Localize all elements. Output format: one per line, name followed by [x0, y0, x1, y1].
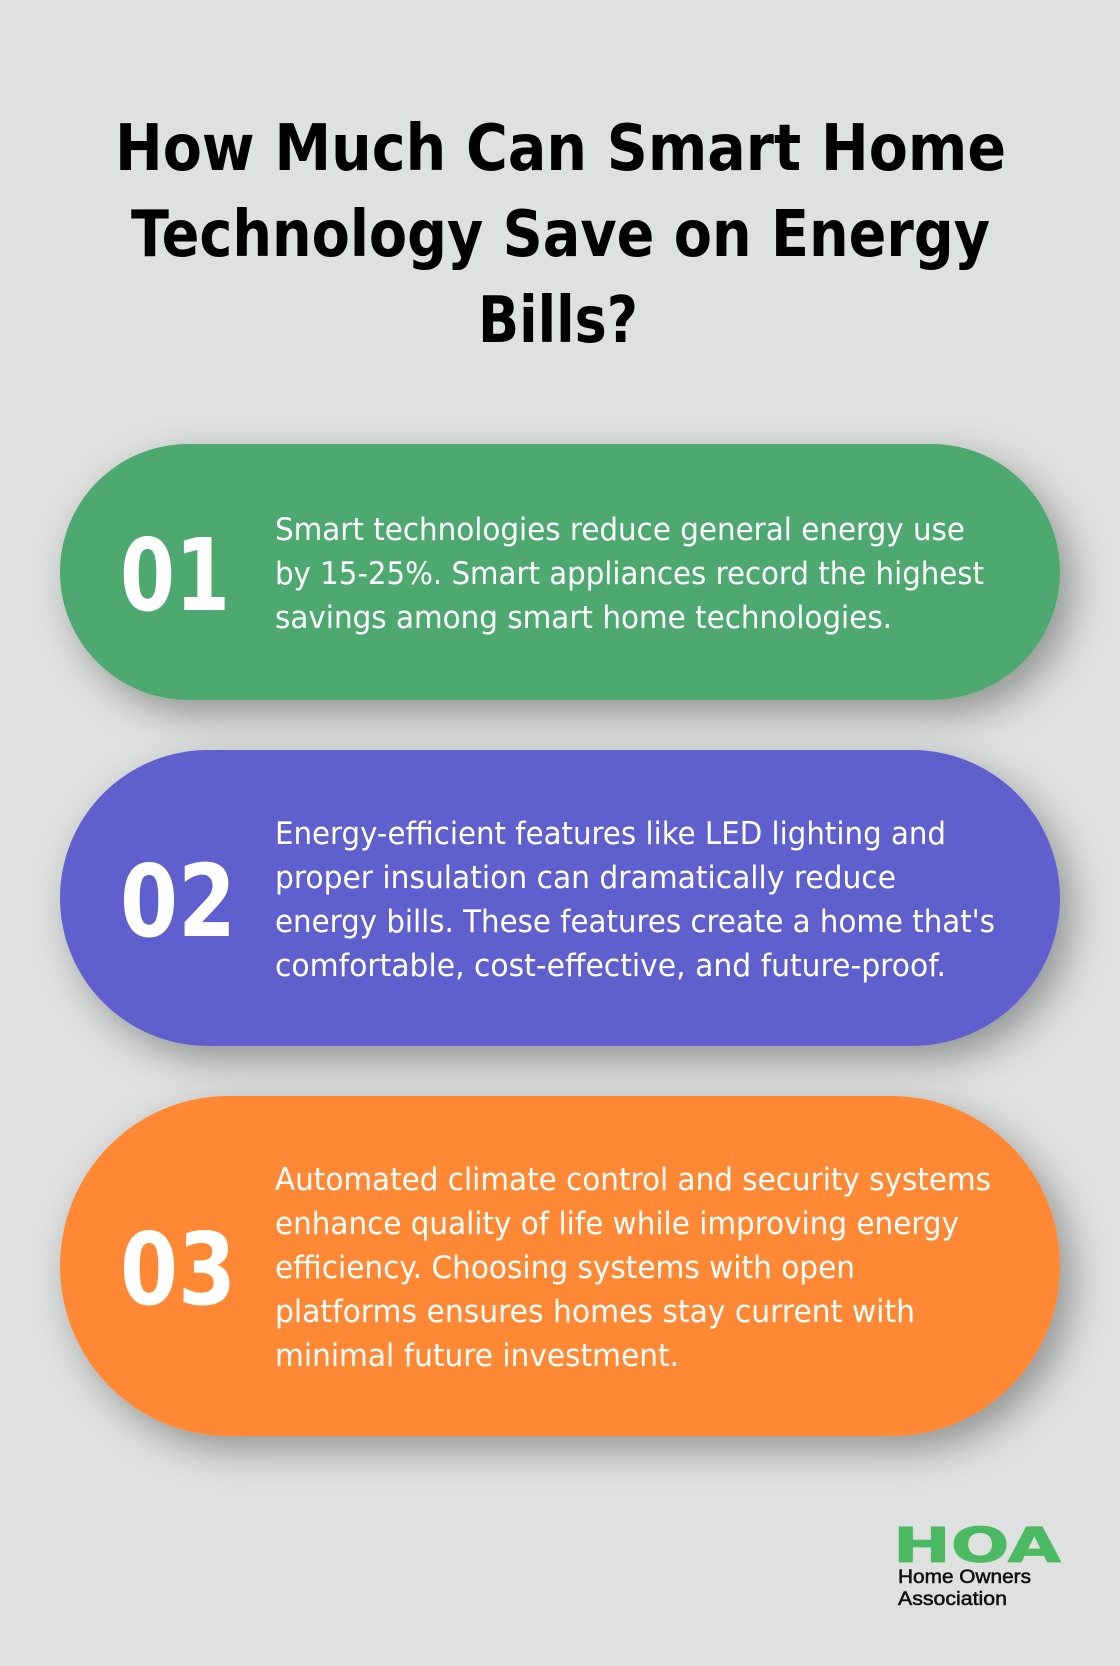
- panel: step 01: [60, 444, 1060, 700]
- pill: orange background: [60, 1096, 1060, 1436]
- text block: step 01: Smart technologies reduce general energy use: [275, 512, 965, 548]
- text block: step 01: by 15-25%. Smart appliances record the highest: [275, 556, 984, 592]
- logo text: Association: [898, 1588, 1007, 1610]
- logo: Home Owners Association: [893, 1518, 1061, 1610]
- text block: step 02: Energy-efficient features like LED lighting and: [275, 816, 946, 852]
- text block: step 02: proper insulation can dramatically reduce: [275, 860, 896, 896]
- text block: step 03: minimal future investment.: [275, 1338, 679, 1374]
- text block: step 03: efficiency. Choosing systems with open: [275, 1250, 855, 1286]
- logo text: [898, 1566, 1031, 1610]
- text block: step 03: platforms ensures homes stay current with: [275, 1294, 915, 1330]
- text block: step 03: enhance quality of life while improving energy: [275, 1206, 959, 1242]
- pill: green background: [60, 444, 1060, 700]
- logo mark: HOA: HOA: [893, 1518, 1061, 1574]
- pill: purple background: [60, 750, 1060, 1046]
- panel: step 02: [60, 750, 1060, 1046]
- text block: step 03: [275, 1162, 991, 1374]
- number 01: 01: [120, 517, 230, 634]
- panel: step 03: [60, 1096, 1060, 1436]
- number 03: 03: [120, 1211, 236, 1328]
- title: [115, 112, 1006, 358]
- number 02: 02: [120, 843, 236, 960]
- text block: step 03: Automated climate control and security systems: [275, 1162, 991, 1198]
- title: Bills?: [478, 284, 638, 358]
- text block: step 02: energy bills. These features create a home that's: [275, 904, 995, 940]
- title: How Much Can Smart Home: [115, 112, 1006, 186]
- title: Technology Save on Energy: [131, 198, 990, 272]
- text block: step 02: [275, 816, 995, 984]
- logo text: Home Owners: [898, 1566, 1031, 1588]
- text block: step 01: [275, 512, 984, 636]
- text block: step 02: comfortable, cost-effective, and future-proof.: [275, 948, 946, 984]
- text block: step 01: savings among smart home technologies.: [275, 600, 892, 636]
